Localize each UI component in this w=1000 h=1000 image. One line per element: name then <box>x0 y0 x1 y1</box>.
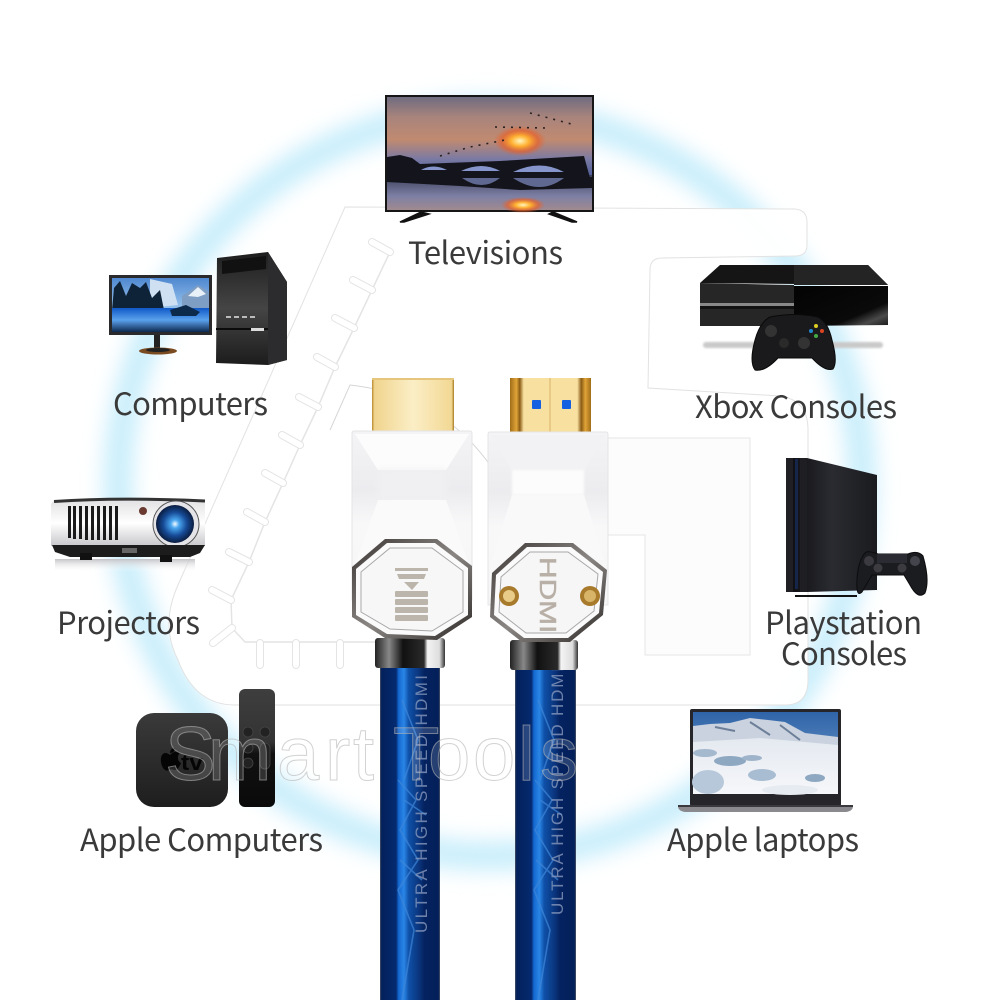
gold connector <box>372 378 454 432</box>
cable: left <box>380 664 440 1000</box>
device: apple tv box and remote <box>136 689 275 807</box>
label: apple computers: Apple Computers <box>80 815 323 860</box>
chrome collar <box>375 638 445 668</box>
blue contacts <box>532 400 541 409</box>
white body <box>488 432 608 605</box>
remote <box>239 689 275 807</box>
blue glow ring <box>118 112 862 856</box>
HDMI plug: right <box>488 378 608 670</box>
cable: right <box>515 667 576 1000</box>
device: projector <box>51 499 205 572</box>
label: computers: Computers <box>113 379 268 424</box>
logo mark <box>395 568 428 621</box>
chrome collar <box>510 640 578 670</box>
cable: right: ULTRA HIGH SPEED HDMI <box>548 667 567 915</box>
apple mark <box>161 748 181 771</box>
HDMI label: HDMI <box>535 557 561 633</box>
gold connector <box>510 378 591 432</box>
label: playstation consoles: Playstation <box>765 598 922 643</box>
label: projectors: Projectors <box>57 598 200 643</box>
device: laptop <box>678 709 853 812</box>
watermark logo shape <box>169 207 808 705</box>
white body <box>352 431 472 600</box>
device: playstation console <box>786 458 927 596</box>
label: xbox consoles: Xbox Consoles <box>695 382 897 427</box>
device: xbox console <box>700 265 888 370</box>
octagon badge <box>352 539 472 640</box>
label: apple laptops: Apple laptops <box>667 815 859 860</box>
cable: left: ULTRA HIGH SPEED HDMI <box>412 675 431 933</box>
device: computer <box>109 252 287 365</box>
tower <box>216 252 287 365</box>
label: playstation consoles line 2: Consoles <box>781 629 907 674</box>
HDMI plug: left <box>352 378 472 668</box>
device: apple tv box and remote: tv <box>181 750 204 775</box>
device: television <box>385 95 594 222</box>
screws <box>499 586 519 606</box>
watermark text: SmartTools <box>165 712 578 797</box>
label: televisions: Televisions <box>408 228 563 273</box>
monitor <box>109 275 212 335</box>
octagon badge <box>490 543 607 642</box>
box <box>136 713 228 807</box>
